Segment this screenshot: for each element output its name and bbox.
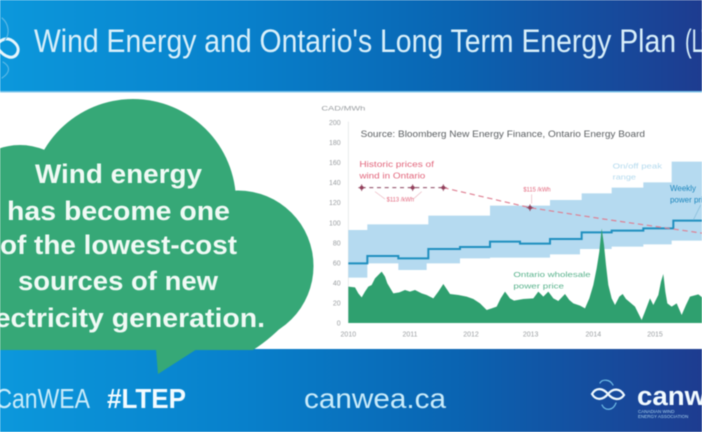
CanWEA wordmark: ENERGY ASSOCIATION <box>638 414 688 419</box>
y axis labels: 0 <box>337 320 341 327</box>
y axis labels: CAD/MWh <box>321 105 366 112</box>
range label: range <box>613 173 636 182</box>
historic prices label: $115 /kWh <box>523 187 551 194</box>
x axis year labels <box>341 332 663 339</box>
footer band <box>0 349 702 432</box>
weekly power price line <box>348 221 702 263</box>
y axis labels: 40 <box>333 280 341 287</box>
wholesale price label: power price <box>513 281 564 290</box>
y axis labels: 60 <box>333 260 341 267</box>
historic wind price dashed line <box>358 184 702 233</box>
historic prices label: wind in Ontario <box>358 171 426 180</box>
website: canwea.ca <box>304 383 446 414</box>
weekly power price label <box>670 184 702 220</box>
icon: CanWEA logo in footer <box>592 380 624 409</box>
y axis labels: 160 <box>329 160 341 167</box>
price markers <box>358 184 533 211</box>
icon: CanWEA logo in header <box>0 18 18 78</box>
x axis year labels: 2010 <box>341 332 356 339</box>
source note: Source: Bloomberg New Energy Finance, Ontario Energy Board <box>361 129 645 139</box>
y axis labels <box>321 105 366 327</box>
y axis labels: 180 <box>329 140 341 147</box>
wholesale price label: Ontario wholesale <box>513 270 591 279</box>
historic prices label: $113 /kWh <box>387 197 414 204</box>
x axis year labels: 2012 <box>463 332 479 339</box>
historic prices label: Historic prices of <box>359 160 435 169</box>
range label <box>613 161 662 182</box>
speech cloud callout <box>0 99 314 374</box>
y axis labels: 120 <box>329 200 341 207</box>
callout text: has become one <box>7 196 230 226</box>
callout text: Wind energy <box>35 159 202 189</box>
hashtag: #LTEP <box>107 383 186 414</box>
callout text: sources of new <box>18 266 219 296</box>
overall price range band <box>348 162 702 278</box>
chart: price of wind vs Ontario power prices <box>321 105 702 339</box>
y axis labels: 200 <box>329 120 341 127</box>
y axis labels: 80 <box>333 240 341 247</box>
y axis labels: 140 <box>329 180 341 187</box>
x axis year labels: 2011 <box>402 332 418 339</box>
x axis year labels: 2014 <box>586 332 601 339</box>
Ontario wholesale power price area <box>348 228 702 323</box>
x axis year labels: 2013 <box>523 332 539 339</box>
historic prices label <box>358 160 551 204</box>
callout text: of the lowest-cost <box>0 230 237 260</box>
wholesale price label <box>513 270 591 290</box>
range label: On/off peak <box>613 161 662 170</box>
y axis labels: 20 <box>333 300 341 307</box>
callout text <box>0 159 265 333</box>
speech bubble tail <box>156 349 197 374</box>
x axis year labels: 2015 <box>647 332 663 339</box>
header banner <box>0 0 702 92</box>
y axis labels: 100 <box>329 220 341 227</box>
weekly power price label: Weekly <box>670 184 696 193</box>
CanWEA wordmark: CANADIAN WIND <box>638 409 675 414</box>
